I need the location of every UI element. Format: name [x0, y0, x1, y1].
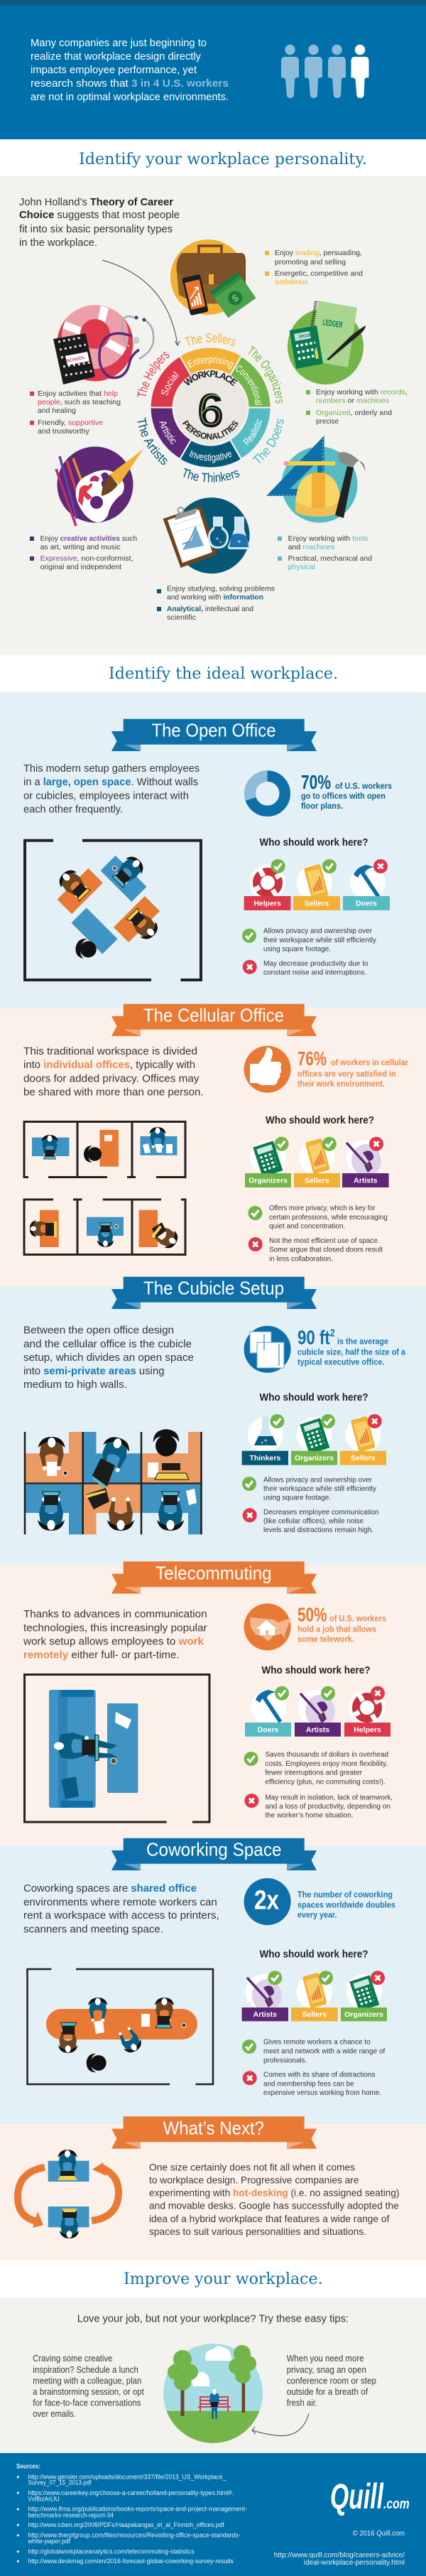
intro text — [23, 762, 200, 815]
donut chart: 70 percent — [250, 776, 285, 811]
personality picks: Sellers — [305, 1177, 329, 1185]
sources: benchmarks-research-report-34 — [28, 2511, 114, 2518]
heading: who should work here: Who should work here? — [260, 1948, 368, 1960]
intro text: Many companies are just beginning to — [31, 37, 207, 49]
wheel centre title: PERSONALITIES — [182, 420, 239, 439]
calculator: 00018 — [298, 333, 311, 340]
intro text: medium to high walls. — [23, 1379, 127, 1391]
intro text: doors for added privacy. Offices may — [23, 1073, 200, 1085]
panel: intro banner — [0, 0, 426, 139]
illustration: the helpers — [53, 302, 153, 384]
intro text: into semi-private areas using — [23, 1365, 165, 1377]
con: and a loss of productivity, depending on — [266, 1802, 390, 1811]
intro text: This traditional workspace is divided — [23, 1045, 197, 1057]
con — [243, 959, 368, 977]
pro: certain professions, while encouraging — [269, 1213, 388, 1222]
text: what's next — [149, 2161, 400, 2237]
tip: privacy: When you need more — [287, 2354, 364, 2364]
ribbon: the open office: The Open Office — [152, 720, 275, 741]
con: constant noise and interruptions. — [263, 969, 366, 977]
intro text: This modern setup gathers employees — [23, 762, 200, 775]
flasks — [208, 517, 250, 549]
tip: creative inspiration: meeting with a colleague, plan — [33, 2376, 141, 2386]
intro text: research shows that 3 in 4 U.S. workers — [31, 77, 229, 90]
theory text: fit into six basic personality types — [19, 223, 173, 235]
intro text: work setup allows employees to work — [23, 1635, 204, 1647]
stat text: 70% — [301, 771, 331, 793]
intro text: into individual offices, typically with — [23, 1059, 195, 1071]
logo: quill.com: Quill — [330, 2477, 384, 2516]
text: thinkers traits: scientific — [167, 613, 196, 622]
illustration: the organizers — [288, 301, 366, 384]
text: helpers traits: and healing — [38, 406, 76, 415]
text: sellers traits: Energetic, competitive and — [275, 269, 363, 278]
text: helpers traits: and trustworthy — [38, 427, 90, 436]
ribbon: telecommuting: Telecommuting — [155, 1562, 272, 1583]
con: the worker’s home situation. — [266, 1811, 354, 1820]
illustration: the artists — [56, 446, 143, 526]
tip: privacy: conference room or step — [287, 2376, 376, 2386]
con: Some argue that closed doors result — [269, 1246, 383, 1254]
con — [243, 1508, 379, 1534]
tip: creative inspiration: for face-to-face conversations — [33, 2398, 141, 2408]
wheel ring labels: Realistic — [243, 419, 262, 446]
ribbon: the cellular office — [111, 1004, 317, 1036]
text: artists traits: original and independent — [40, 563, 121, 571]
intro text: be shared with more than one person. — [23, 1086, 204, 1098]
copyright and url — [274, 2530, 405, 2567]
stat text: floor plans. — [301, 801, 343, 811]
intro text: Between the open office design — [23, 1325, 174, 1337]
theory text — [19, 196, 180, 249]
intro text: are not in optimal workplace environments. — [31, 91, 229, 103]
intro text: rent a workspace with access to printers, — [23, 1909, 219, 1922]
heading: who should work here: Who should work here? — [260, 1391, 368, 1403]
wheel outer labels: The Sellers — [185, 333, 236, 346]
intro text — [23, 1608, 207, 1661]
notebook: SCHOOL — [66, 355, 86, 364]
personality picks: Doers — [356, 900, 377, 908]
personality picks: Organizers — [248, 1177, 288, 1185]
pro: Allows privacy and ownership over — [263, 1475, 372, 1484]
text: artists traits: Enjoy creative activities such — [40, 534, 137, 543]
sources: http://globalworkplaceanalytics.com/telecommuting-statistics — [28, 2548, 195, 2555]
con: in less collaboration. — [269, 1255, 333, 1263]
pro: their workspace while still efficiently — [263, 936, 377, 944]
wheel ring labels: Enterprising — [187, 355, 234, 370]
tip: creative inspiration: Craving some creative — [33, 2354, 112, 2364]
stat text: spaces worldwide doubles — [297, 1899, 395, 1909]
intro text: setup, which divides an open space — [23, 1352, 194, 1364]
con: and membership fees can be — [263, 2079, 354, 2088]
personality picks: Organizers — [295, 1454, 334, 1462]
text: sellers traits: Enjoy leading, persuading, — [275, 249, 362, 257]
con: (like cellular offices), while noise — [263, 1517, 364, 1526]
stat text: of workers in cellular — [331, 1057, 408, 1067]
sources: http://www.deskmag.com/en/2016-forecast-global-coworking-survey-results — [28, 2558, 234, 2565]
ribbon: the open office — [111, 719, 317, 751]
personality picks — [242, 1971, 387, 2021]
stat text: every year. — [297, 1909, 337, 1919]
arrow: to wheel — [102, 260, 180, 345]
intro text — [23, 1325, 194, 1391]
wheel outer labels: The Helpers — [137, 352, 169, 397]
con — [243, 2071, 381, 2097]
copyright and url: ideal-workplace-personality.html — [304, 2559, 405, 2567]
text: doers traits: Enjoy working with tools — [288, 534, 368, 543]
con: Comes with its share of distractions — [263, 2071, 375, 2079]
bench — [198, 2397, 231, 2412]
personality picks: Helpers — [354, 1725, 381, 1734]
text: helpers traits: Enjoy activities that help — [38, 389, 118, 398]
stat text: 2 — [330, 1327, 335, 1340]
tip: privacy: fresh air. — [287, 2398, 317, 2408]
floor plan: coworking table — [27, 1969, 213, 2084]
sources: http://www.gensler.com/uploads/document/337/file/2013_US_Workplace_ — [28, 2473, 226, 2480]
text: doers traits: physical — [288, 563, 315, 571]
stat text: go to offices with open — [301, 791, 386, 801]
sources: Survey_07_15_2013.pdf — [28, 2479, 92, 2486]
wheel ring labels — [159, 355, 263, 463]
personality picks: Sellers — [302, 2010, 327, 2019]
intro text: each other frequently. — [23, 803, 123, 815]
copyright and url: © 2016 Quill.com — [353, 2530, 405, 2538]
wheel ring labels: Conventional — [236, 365, 263, 405]
icon: four workers, one highlighted — [281, 45, 369, 98]
personality picks — [245, 1137, 389, 1187]
ribbon: what's next — [111, 2116, 317, 2149]
illustration: the doers — [265, 435, 366, 523]
theory text: in the workplace. — [19, 237, 97, 249]
personality picks: Doers — [258, 1725, 279, 1734]
pro: using square footage. — [263, 1494, 331, 1502]
floor plan: cellular offices — [24, 1121, 185, 1255]
pro — [244, 1750, 388, 1786]
text: what's next: and movable desks. Google has successfully adopted the — [149, 2199, 399, 2211]
con — [244, 1793, 393, 1820]
sources: http://www.icben.org/2008/PDFs/Haapakangas_et_al_Finnish_offices.pdf — [28, 2521, 224, 2528]
heading: who should work here: Who should work here? — [266, 1114, 374, 1126]
panel: footer — [0, 2453, 426, 2576]
notebook — [53, 333, 95, 384]
ribbon: coworking space — [111, 1838, 317, 1870]
stat text: cubicle size, half the size of a — [297, 1347, 405, 1357]
text: artists traits: as art, writing and music — [40, 543, 121, 551]
tip: creative inspiration: a brainstorming session, or opt — [33, 2387, 144, 2397]
panel: the cubicle setup — [0, 1277, 426, 1565]
text: organizers traits: Enjoy working with records, — [316, 388, 408, 397]
panel: easy tips — [0, 2297, 426, 2453]
pro: fewer interruptions and greater — [266, 1769, 362, 1777]
text: thinkers traits — [157, 585, 275, 622]
text: helpers traits: Friendly, supportive — [38, 419, 103, 427]
personality picks: Sellers — [351, 1454, 376, 1462]
pro: professionals. — [263, 2056, 307, 2064]
stat text: their work environment. — [297, 1079, 385, 1089]
pro — [242, 927, 377, 954]
floor plan: home office — [24, 1674, 209, 1822]
intro text — [23, 1045, 204, 1098]
pro — [248, 1204, 388, 1231]
personality picks — [242, 1414, 386, 1465]
pro: efficiency (plus, no commuting costs!). — [266, 1777, 386, 1786]
heading: identify the ideal workplace: Identify the ideal workplace. — [109, 665, 338, 683]
intro text: Thanks to advances in communication — [23, 1608, 207, 1620]
stat text: 90 ft — [297, 1327, 339, 1349]
icon: cubicle size squares — [244, 1326, 291, 1373]
illustration: worker in the park — [163, 2344, 263, 2444]
personality picks: Helpers — [253, 900, 281, 908]
text: sellers traits — [265, 249, 363, 286]
text: doers traits: and machines — [288, 543, 335, 551]
illustration: the sellers — [170, 239, 256, 318]
intro text: realize that workplace design directly — [31, 50, 201, 63]
phone — [182, 274, 209, 316]
tip: privacy: outside for a breath of — [287, 2387, 368, 2397]
icon: rotating desks — [18, 2150, 119, 2238]
personality picks: Artists — [306, 1725, 329, 1734]
ribbon: telecommuting — [111, 1561, 317, 1594]
con: levels and distractions remain high. — [263, 1526, 373, 1534]
heading: improve your workplace: Improve your workplace. — [124, 2270, 323, 2288]
text: what's next: One size certainly does not fit all when it comes — [149, 2161, 355, 2172]
text: organizers traits: Organized, orderly and — [316, 409, 392, 417]
intro text — [31, 37, 229, 103]
panel: coworking space — [0, 1838, 426, 2124]
ribbon: the cellular office: The Cellular Office — [143, 1005, 284, 1026]
intro text: Coworking spaces are shared office — [23, 1882, 197, 1895]
pencils — [56, 456, 84, 526]
icon: two times badge: 2x — [254, 1886, 279, 1916]
logo: quill.com: .com — [383, 2496, 410, 2512]
panel: telecommuting — [0, 1561, 426, 1845]
text: doers traits: Practical, mechanical and — [288, 554, 372, 563]
stat text: is the average — [337, 1337, 388, 1347]
ribbon: the cubicle setup: The Cubicle Setup — [143, 1278, 284, 1299]
panel: the cellular office — [0, 1004, 426, 1286]
pro — [242, 1475, 377, 1502]
stat text: The number of coworking — [297, 1890, 393, 1899]
pro: Saves thousands of dollars in overhead — [266, 1750, 388, 1759]
stat text: 50% — [297, 1604, 327, 1626]
ribbon: the cubicle setup — [111, 1277, 317, 1309]
text: thinkers traits: and working with information — [167, 593, 263, 602]
con — [248, 1236, 383, 1263]
stat text: typical executive office. — [297, 1357, 385, 1367]
text: thinkers traits: Enjoy studying, solving problems — [167, 585, 275, 593]
stat text: 76% — [297, 1047, 327, 1069]
intro text: environments where remote workers can — [23, 1896, 217, 1908]
wheel outer labels: The Doers — [252, 419, 284, 463]
pro: Offers more privacy, which is key for — [269, 1204, 376, 1212]
stat text: of U.S. workers — [329, 1614, 386, 1624]
pro: quiet and concentration. — [269, 1222, 345, 1231]
pro: meet and network with a wide range of — [263, 2047, 385, 2056]
sources: white-paper.pdf — [27, 2538, 70, 2545]
wheel outer labels: The Organizers — [248, 345, 283, 404]
heading: who should work here: Who should work here? — [260, 836, 368, 848]
text: doers traits — [278, 534, 372, 571]
theory text: John Holland’s Theory of Career — [19, 196, 173, 208]
pro: Allows privacy and ownership over — [263, 927, 372, 935]
stat text: offices are very satisfied in — [297, 1069, 396, 1079]
personality picks: Organizers — [344, 2010, 383, 2019]
panel: the open office — [0, 692, 426, 1008]
intro text: remotely either full- or part-time. — [23, 1649, 180, 1661]
intro text: and the cellular office is the cubicle — [23, 1338, 192, 1350]
wheel centre title: 6 — [197, 384, 224, 438]
sources: Sources: — [16, 2463, 40, 2470]
wheel outer labels: The Artists — [138, 417, 168, 465]
text: what's next: idea of a hybrid workplace that features a wide range of — [149, 2213, 390, 2224]
con: expensive versus working from home. — [263, 2089, 381, 2097]
wheel centre title: WORKPLACE — [183, 370, 237, 387]
stat text — [297, 1327, 405, 1367]
con: Not the most efficient use of space. — [269, 1236, 380, 1245]
text: artists traits: Expressive, non-conformist, — [40, 554, 133, 563]
text: organizers traits — [306, 388, 408, 426]
tip: privacy — [287, 2354, 376, 2408]
wheel ring labels: Artistic — [159, 422, 176, 444]
text: organizers traits: precise — [316, 417, 339, 426]
tip: creative inspiration: over emails. — [33, 2409, 76, 2419]
ribbon: coworking space: Coworking Space — [146, 1839, 281, 1860]
intro text: scanners and meeting space. — [23, 1923, 163, 1935]
stat text — [297, 1890, 395, 1919]
panel: what's next — [0, 2116, 426, 2260]
con: May decrease productivity due to — [263, 959, 368, 968]
tips heading: Love your job, but not your workplace? Try these easy tips: — [77, 2313, 349, 2325]
intro text: in a large, open space. Without walls — [23, 776, 198, 788]
tip: creative inspiration — [33, 2354, 144, 2419]
floor plan: open office — [25, 841, 201, 980]
text: thinkers traits: Analytical, intellectual and — [167, 605, 253, 613]
con: May result in isolation, lack of teamwork, — [266, 1793, 393, 1801]
text: sellers traits: promoting and selling — [275, 258, 346, 266]
heading: who should work here: Who should work here? — [261, 1664, 371, 1676]
personality picks: Artists — [253, 2010, 277, 2019]
wheel centre title — [182, 370, 239, 439]
icon: thumbs up — [244, 1046, 291, 1093]
stat text: hold a job that allows — [297, 1624, 376, 1634]
wheel outer labels — [137, 333, 284, 482]
intro text: technologies, this increasingly popular — [23, 1622, 207, 1634]
text: organizers traits: numbers or machines — [316, 397, 389, 405]
text: helpers traits — [30, 389, 121, 436]
text: what's next: spaces to suit various personalities and situations. — [149, 2226, 366, 2237]
tip: privacy: privacy, snag an open — [287, 2365, 366, 2375]
stat text — [297, 1604, 386, 1644]
pro: costs. Employees enjoy more flexibility, — [266, 1759, 388, 1768]
pro: using square footage. — [263, 945, 331, 954]
text: what's next: experimenting with hot-desking (i.e. no assigned seating) — [149, 2187, 400, 2198]
sources — [16, 2463, 247, 2565]
sources: https://www.careerkey.org/choose-a-career/holland-personality-types.html#. — [28, 2489, 234, 2496]
stethoscope — [99, 316, 153, 378]
personality picks: Sellers — [305, 900, 329, 908]
text: helpers traits: people, such as teaching — [38, 398, 121, 406]
wheel chart: six personalities — [137, 333, 284, 482]
pro — [242, 2038, 385, 2064]
icon: two times badge — [244, 1878, 291, 1925]
sources: http://www.therpfgroup.com/files/resources/Revisiting-office-space-standards- — [28, 2531, 241, 2538]
personality picks — [244, 859, 390, 910]
illustration: the organizers: LEDGER — [322, 317, 344, 330]
intro text: or cubicles, employees interact with — [23, 789, 189, 802]
floor plan: cubicles — [25, 1429, 202, 1534]
sources: VxIfbzArLIU — [28, 2495, 60, 2502]
theory text: Choice suggests that most people — [19, 209, 180, 221]
stat text: of U.S. workers — [335, 781, 392, 791]
personality picks: Artists — [354, 1177, 378, 1185]
con: Decreases employee communication — [263, 1508, 379, 1516]
wheel ring labels: Investigative — [189, 450, 231, 463]
icon: us map and home — [244, 1603, 291, 1650]
wheel outer labels: The Thinkers — [183, 468, 240, 482]
money: $ — [229, 291, 241, 304]
arrow: to park — [252, 2413, 309, 2436]
personality picks: Thinkers — [249, 1454, 280, 1462]
panel: six workplace personalities — [0, 176, 426, 655]
intro text: impacts employee performance, yet — [31, 64, 197, 76]
text: sellers traits: ambitious — [275, 278, 308, 286]
heading: identify your workplace personality: Identify your workplace personality. — [79, 151, 367, 168]
stat text: some telework. — [297, 1634, 354, 1644]
intro text — [23, 1882, 219, 1935]
stat text — [301, 771, 392, 811]
tip: creative inspiration: inspiration? Schedule a lunch — [33, 2365, 138, 2375]
ribbon: what's next: What’s Next? — [163, 2117, 264, 2138]
text: artists traits — [30, 534, 137, 571]
text: what's next: to workplace design. Progressive companies are — [149, 2174, 359, 2185]
wheel ring labels: Social — [161, 371, 179, 395]
pro: their workspace while still efficiently — [263, 1484, 377, 1493]
personality picks — [245, 1686, 390, 1737]
illustration: the thinkers — [163, 497, 250, 573]
pro: Gives remote workers a chance to — [263, 2038, 371, 2047]
sources: http://www.ifma.org/publications/books-reports/space-and-project-management- — [28, 2506, 247, 2513]
copyright and url: http://www.quill.com/blog/careers-advice/ — [274, 2552, 405, 2560]
stat text — [297, 1047, 408, 1089]
